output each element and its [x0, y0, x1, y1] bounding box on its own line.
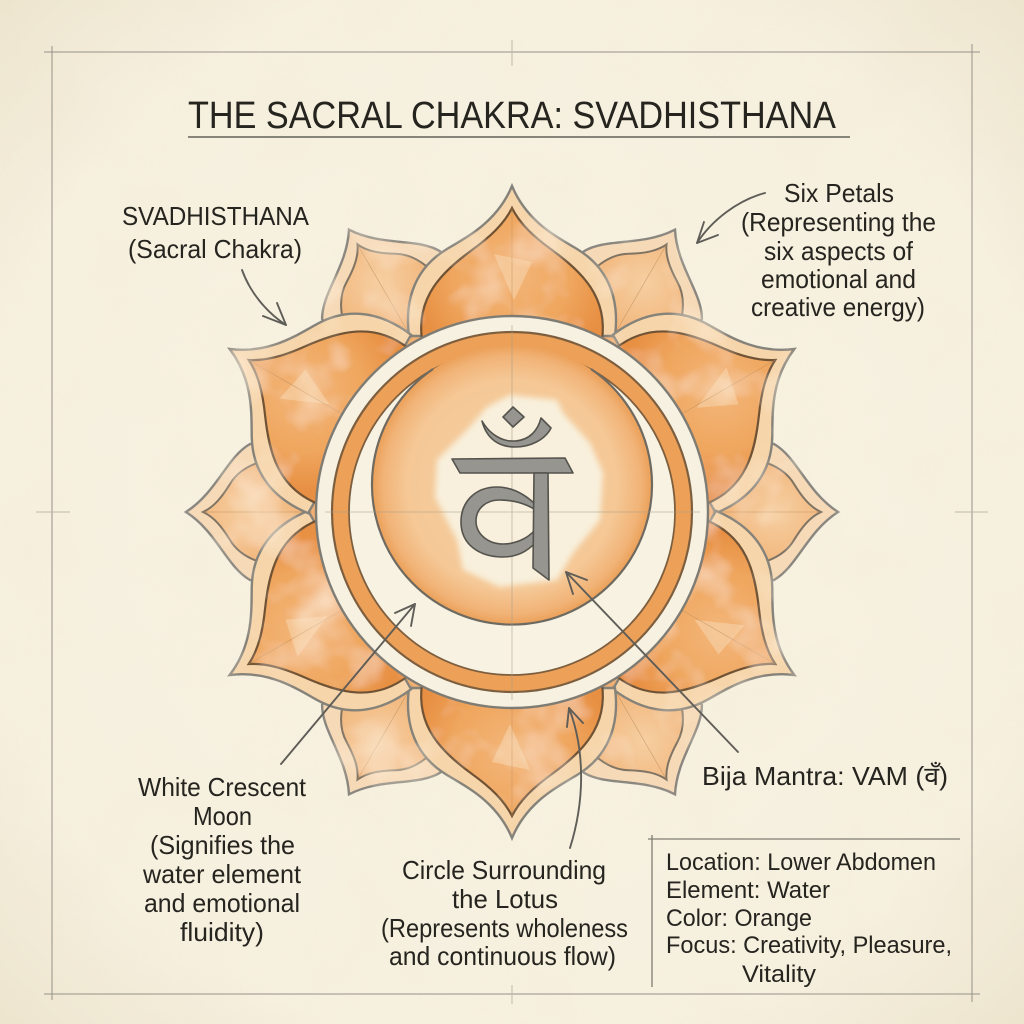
label: svadhisthana — [122, 201, 310, 264]
label: white crescent moon: White Crescent — [138, 772, 307, 802]
label: bija mantra: Bija Mantra: VAM (वँ) — [702, 761, 948, 791]
label: six petals: (Representing the — [741, 207, 936, 237]
head bar — [452, 458, 573, 473]
white crescent moon — [349, 349, 675, 675]
label: svadhisthana: SVADHISTHANA — [122, 201, 310, 231]
label: circle surrounding the lotus: the Lotus — [452, 884, 558, 914]
label: circle surrounding the lotus — [381, 855, 628, 971]
label: six petals: emotional and — [761, 264, 916, 294]
label: circle surrounding the lotus: (Represents wholeness — [381, 913, 628, 943]
label: white crescent moon: and emotional — [144, 888, 300, 918]
arrow: to bija symbol — [566, 572, 738, 752]
stem — [533, 473, 549, 580]
info box text — [666, 849, 952, 988]
pale centre wash — [435, 395, 603, 587]
chandra crescent — [482, 418, 551, 447]
info box text: Color: Orange — [666, 905, 812, 932]
title: THE SACRAL CHAKRA: SVADHISTHANA — [188, 95, 837, 137]
label: circle surrounding the lotus: Circle Surrounding — [402, 855, 606, 885]
label: svadhisthana: (Sacral Chakra) — [128, 234, 302, 264]
lotus mandala — [178, 186, 846, 838]
label: white crescent moon: (Signifies the — [150, 830, 295, 860]
label: six petals: creative energy) — [751, 292, 925, 322]
label: six petals — [741, 178, 936, 322]
info box text: Location: Lower Abdomen — [666, 849, 936, 876]
small petals — [186, 194, 838, 830]
large petals — [178, 186, 846, 838]
orange ring — [332, 332, 692, 692]
outer white circle — [316, 316, 708, 708]
info box text: Vitality — [742, 961, 816, 988]
arrow: to surrounding circle — [567, 708, 583, 848]
icon: bija symbol drawing — [452, 407, 573, 580]
info box text: Focus: Creativity, Pleasure, — [666, 932, 952, 959]
arrow: to sacral chakra petal — [242, 270, 286, 325]
label: white crescent moon: Moon — [193, 801, 252, 831]
bowl — [461, 487, 536, 557]
label: six petals: Six Petals — [784, 178, 894, 208]
pencil crosshair — [325, 325, 700, 700]
label: white crescent moon: water element — [142, 859, 302, 889]
info box text: Element: Water — [666, 877, 830, 904]
label: white crescent moon: fluidity) — [180, 917, 264, 947]
arrow: to crescent — [281, 604, 415, 764]
info box — [648, 835, 960, 988]
arrow: to six petals — [697, 193, 765, 243]
bindu diamond — [503, 407, 524, 427]
label: six petals: six aspects of — [764, 236, 914, 266]
label: white crescent moon — [138, 772, 307, 947]
label: circle surrounding the lotus: and continuous flow) — [389, 941, 616, 971]
inner orange disk — [372, 345, 652, 625]
